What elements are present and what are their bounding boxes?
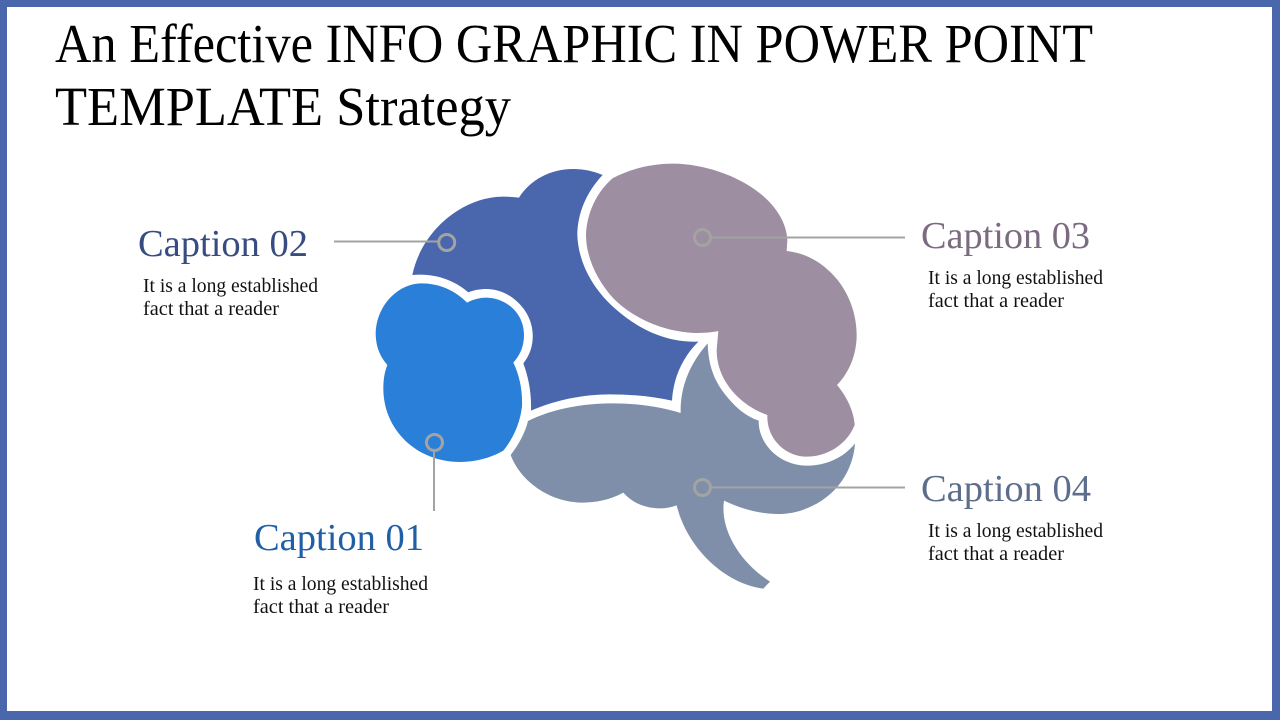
text 01: fact that a reader [253,597,390,618]
heading 04: Caption 04 [921,468,1091,510]
text 02: It is a long established [143,276,318,297]
text 04: It is a long established [928,521,1103,542]
callout: caption 03 [694,215,1103,312]
text 03 [928,268,1103,312]
callout: caption 01 [253,434,442,618]
brain lobe: grey blue with stem [511,343,855,589]
brain lobe: bright blue [376,283,524,462]
callout: caption 04 [694,468,1103,565]
text 03: It is a long established [928,268,1103,289]
callout: caption 02 [138,223,455,320]
leader line 03 [711,236,905,238]
marker 02 [439,234,455,250]
text 04 [928,521,1103,565]
title: TEMPLATE Strategy [55,76,511,137]
text 02 [143,276,318,320]
text 04: fact that a reader [928,544,1065,565]
brain lobe: dark blue [412,169,698,411]
text 01: It is a long established [253,574,428,595]
title: An Effective INFO GRAPHIC IN POWER POINT [55,13,1093,74]
text 03: fact that a reader [928,291,1065,312]
brain diagram [376,164,857,589]
heading 03: Caption 03 [921,215,1090,257]
text 01 [253,574,428,618]
marker 01 [426,434,442,450]
leader line 01 [433,451,435,511]
marker 04 [694,480,710,496]
heading 02: Caption 02 [138,223,308,265]
heading 01: Caption 01 [254,517,424,559]
leader line 04 [711,486,905,488]
leader line 02 [334,240,438,242]
title [55,13,1093,137]
brain lobe: mauve [586,164,857,457]
text 02: fact that a reader [143,299,280,320]
marker 03 [694,230,710,246]
